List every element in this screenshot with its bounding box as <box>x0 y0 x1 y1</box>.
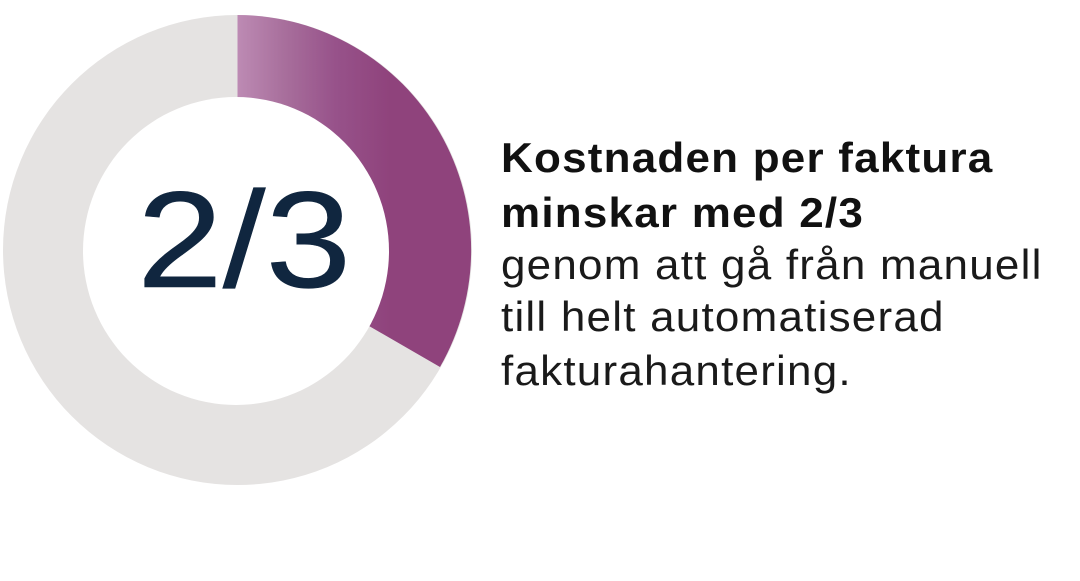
description text: minskar med 2/3 <box>501 189 864 236</box>
description text: till helt automatiserad <box>501 293 945 340</box>
donut center value: 2/3 <box>137 164 351 316</box>
donut chart <box>3 15 472 485</box>
description text: Kostnaden per faktura <box>501 134 993 181</box>
description text: genom att gå från manuell <box>501 241 1043 288</box>
description text <box>501 134 1043 394</box>
description text: fakturahantering. <box>501 347 852 394</box>
